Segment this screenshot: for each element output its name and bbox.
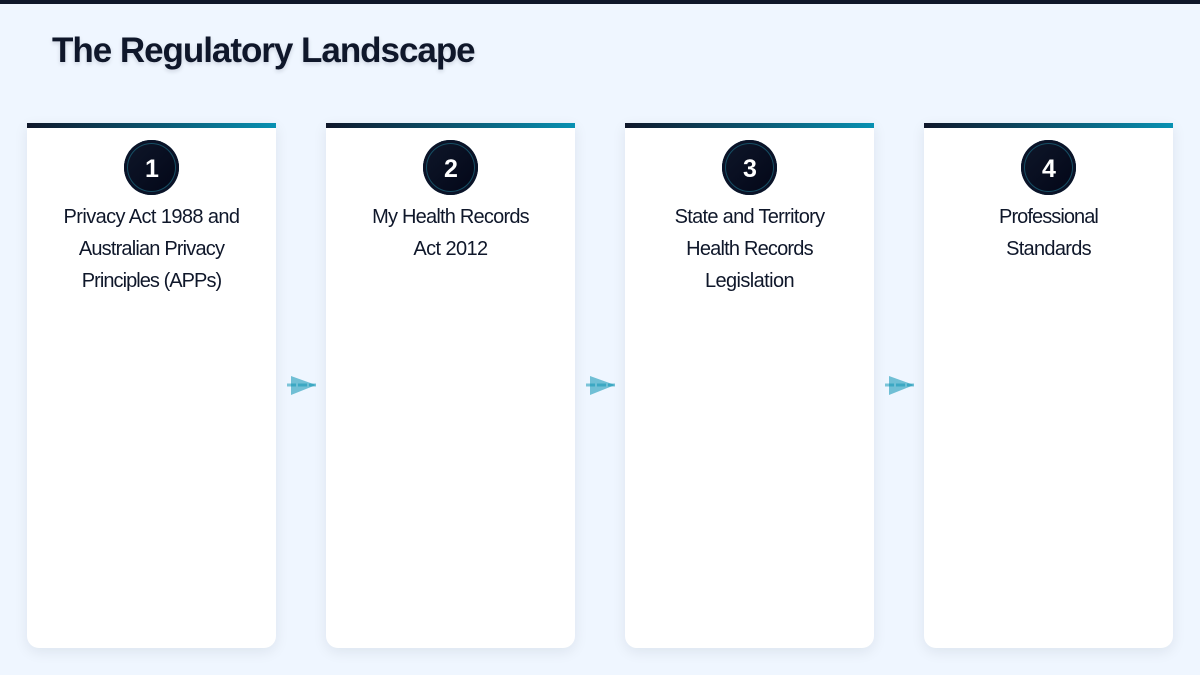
number badge 4: 4	[1042, 155, 1056, 183]
text: step 1 label: Australian Privacy	[79, 238, 224, 260]
text: step 2 label	[372, 206, 529, 260]
number badge 1: 1	[145, 155, 159, 183]
arrow 2 to 3	[586, 376, 615, 395]
number badge 2	[423, 140, 478, 195]
title: The Regulatory Landscape	[52, 31, 475, 70]
number badge 3	[722, 140, 777, 195]
text: step 1 label: Privacy Act 1988 and	[64, 206, 239, 228]
text: step 2 label: Act 2012	[413, 238, 488, 260]
number badge 3: 3	[743, 155, 757, 183]
number badge 1	[124, 140, 179, 195]
text: step 2 label: My Health Records	[372, 206, 529, 228]
arrow 1 to 2	[287, 376, 316, 395]
text: step 4 label	[999, 206, 1098, 260]
arrow 3 to 4	[885, 376, 914, 395]
text: step 1 label: Principles (APPs)	[82, 270, 221, 292]
text: step 3 label: Legislation	[705, 270, 794, 292]
panel: step 4	[924, 123, 1173, 648]
text: step 4 label: Professional	[999, 206, 1098, 228]
text: step 4 label: Standards	[1006, 238, 1091, 260]
panel: step 2	[326, 123, 575, 648]
text: step 3 label: Health Records	[686, 238, 813, 260]
text: step 3 label: State and Territory	[675, 206, 824, 228]
panel: step 1	[27, 123, 276, 648]
text: step 1 label	[64, 206, 239, 292]
text: step 3 label	[675, 206, 825, 292]
number badge 2: 2	[444, 155, 458, 183]
number badge 4	[1021, 140, 1076, 195]
panel: step 3	[625, 123, 874, 648]
